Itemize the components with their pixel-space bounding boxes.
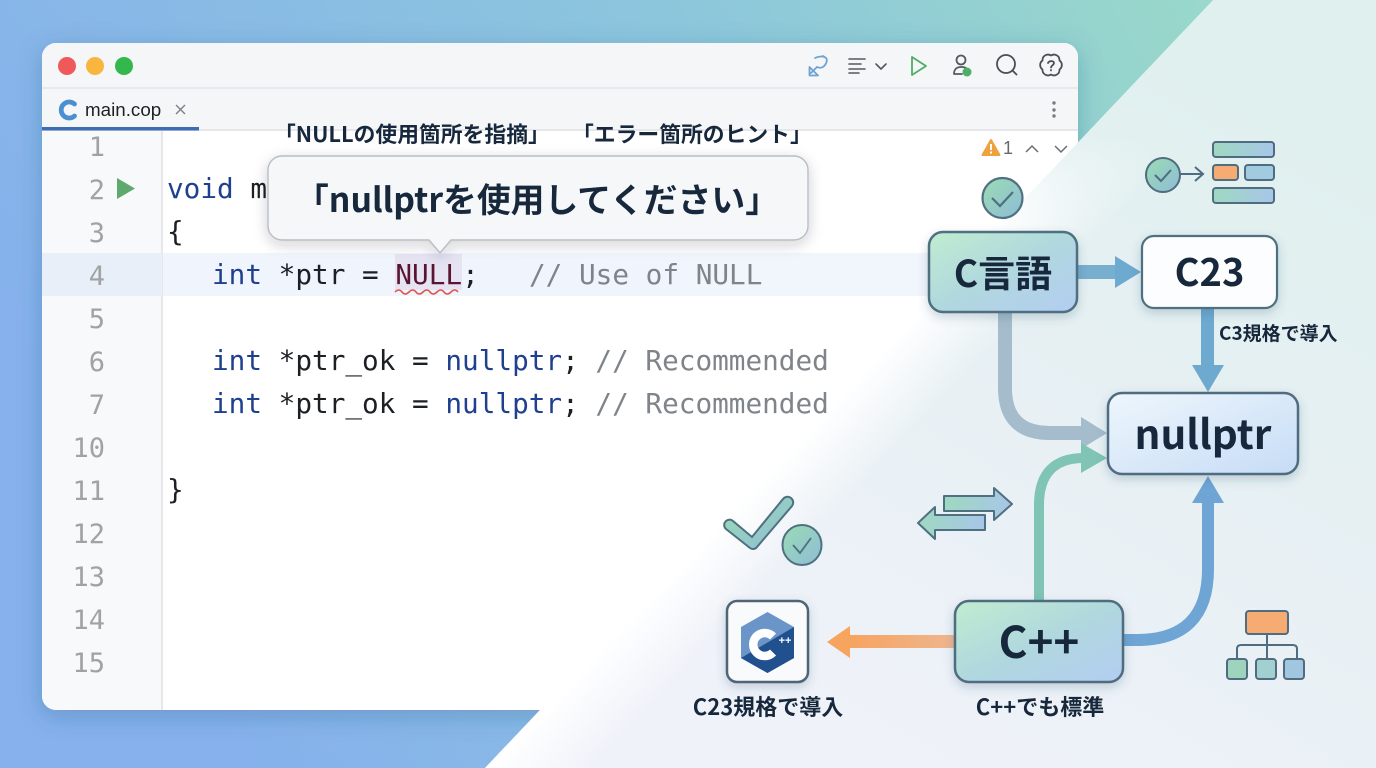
line numbers: 4 xyxy=(89,261,105,292)
line numbers: 6 xyxy=(89,347,105,378)
line numbers: 3 xyxy=(89,218,105,249)
node: nullptr xyxy=(1108,393,1298,474)
node: C++: C++ xyxy=(999,607,1079,671)
panel: code editor window xyxy=(42,43,1078,711)
arrow: C language to nullptr xyxy=(1005,312,1107,449)
code text: { xyxy=(167,215,184,248)
code text: int *ptr = NULL; xyxy=(212,258,479,291)
toolbar icons xyxy=(810,55,1062,76)
line numbers: 11 xyxy=(72,476,105,507)
line numbers: 2 xyxy=(89,175,105,206)
tab: main.cop: main.cop xyxy=(85,99,161,120)
code text: } xyxy=(167,473,184,506)
tab menu dots xyxy=(1052,101,1056,118)
tab: main.cop xyxy=(61,99,185,120)
heading: NULL usage hint: 「NULLの使用箇所を指摘」 xyxy=(274,118,550,149)
arrow: C++ to nullptr blue xyxy=(1123,476,1224,640)
icon: check above C language xyxy=(982,178,1022,218)
code text: int *ptr_ok = nullptr; // Recommended xyxy=(212,387,829,421)
arrow: C++ to logo orange xyxy=(827,626,956,658)
callout: use nullptr: 「nullptrを使用してください」 xyxy=(295,173,779,222)
icon: exchange arrows xyxy=(918,488,1012,539)
heading: error hint: 「エラー箇所のヒント」 xyxy=(572,118,812,149)
line numbers: 10 xyxy=(72,433,105,464)
label: C++ standard: C++でも標準 xyxy=(976,690,1104,722)
code text: int *ptr_ok = nullptr; // Recommended xyxy=(212,344,829,378)
node: C23 xyxy=(1142,236,1277,308)
label: C3 standard: C3規格で導入 xyxy=(1219,319,1338,346)
node: C language xyxy=(929,232,1077,312)
arrow: C language to C23 xyxy=(1077,256,1141,288)
code text xyxy=(167,172,829,506)
line numbers: 12 xyxy=(72,519,105,550)
window control buttons xyxy=(58,57,133,75)
warning indicator xyxy=(982,138,1067,158)
node: C++ xyxy=(955,601,1123,682)
node: C language: C言語 xyxy=(954,244,1052,298)
node: C23: C23 xyxy=(1175,242,1244,297)
line numbers: 1 xyxy=(89,132,105,163)
line numbers xyxy=(72,132,105,679)
code text: // Use of NULL xyxy=(529,258,762,291)
line numbers: 14 xyxy=(72,605,105,636)
node: nullptr: nullptr xyxy=(1135,402,1272,461)
arrow: C++ to nullptr green xyxy=(1039,443,1107,601)
label: C23 standard: C23規格で導入 xyxy=(693,690,843,722)
line numbers: 7 xyxy=(89,390,105,421)
icon: large check with badge xyxy=(724,497,822,565)
line numbers: 15 xyxy=(72,648,105,679)
code text: void main() xyxy=(167,172,350,205)
arrow: C23 to nullptr xyxy=(1192,308,1224,392)
line numbers: 5 xyxy=(89,304,105,335)
icon: C++ logo: ++ xyxy=(779,635,791,647)
light diagonal panel xyxy=(485,0,1376,768)
callout: use nullptr xyxy=(268,156,808,253)
warning indicator: 1 xyxy=(1003,138,1013,158)
icon: hierarchy tree xyxy=(1227,611,1304,679)
line numbers: 13 xyxy=(72,562,105,593)
icon: check to layout blocks xyxy=(1146,142,1274,203)
run marker xyxy=(117,178,135,199)
icon: C++ logo xyxy=(727,601,808,682)
diagonal glow xyxy=(485,161,1086,768)
